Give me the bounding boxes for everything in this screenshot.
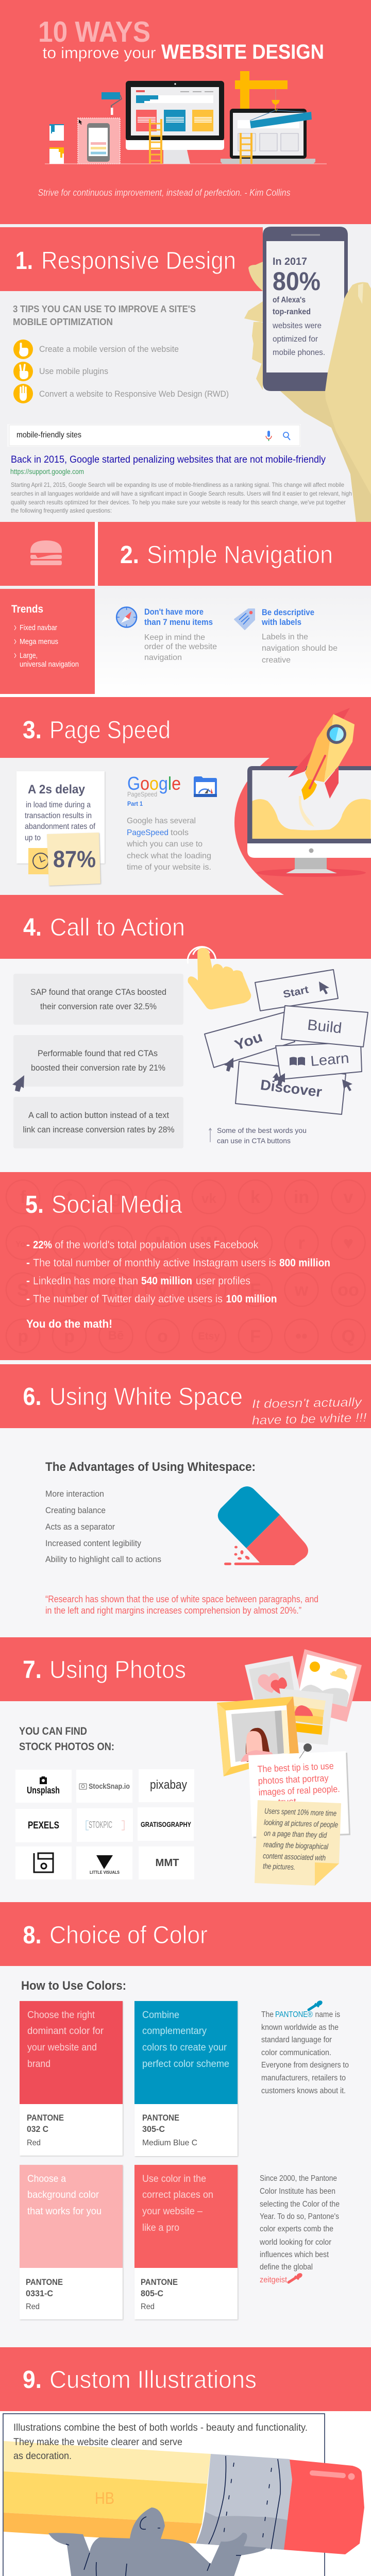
social icon pattern: o <box>64 1233 75 1253</box>
tip: labels: creative <box>262 656 291 665</box>
social icon pattern <box>6 1180 365 1353</box>
tip: menu items <box>144 607 217 662</box>
research quote <box>45 1594 318 1616</box>
heading: simple navigation: 2. <box>120 541 139 569</box>
text: pantone name: The <box>261 2010 274 2019</box>
logo: StockSnap <box>76 1770 132 1803</box>
heading: simple navigation: Simple Navigation <box>147 541 333 569</box>
color card: 305-C: colors to create your <box>142 2042 227 2053</box>
social icon pattern: p <box>18 1327 28 1346</box>
statistics list: LinkedIn has more than <box>33 1275 138 1287</box>
illustration: CTA word buttons: Discover <box>260 1077 323 1100</box>
sticky note: 87% <box>47 833 100 886</box>
text: color of the year: selecting the Color of the <box>260 2200 340 2209</box>
icon: burger menu panel <box>0 522 95 586</box>
color card: 805-C: correct places on <box>142 2190 213 2200</box>
logo: Little Visuals: LITTLE VISUALS <box>90 1870 120 1875</box>
text: pantone name: Everyone from designers to <box>261 2061 349 2070</box>
social icon pattern: m <box>108 1280 124 1300</box>
color card: 805-C <box>134 2165 238 2319</box>
phone with statistic: 80% <box>273 267 321 296</box>
note: best tip: The best tip is to use <box>257 1761 334 1774</box>
tip: menu items: than 7 menu items <box>144 618 213 627</box>
social icon pattern: vk <box>201 1191 216 1206</box>
text: color of the year: Color Institute has been <box>260 2187 335 2196</box>
color card: 032 C: PANTONE <box>27 2113 64 2123</box>
card: button vs link <box>13 1097 183 1148</box>
statistics list: 100 million <box>226 1293 277 1305</box>
social icon pattern: w <box>294 1280 309 1300</box>
logo: Gratisography <box>138 1807 194 1841</box>
panel: section 9 custom illustrations <box>0 2347 371 2576</box>
logo: Stokpic <box>77 1808 133 1842</box>
subheading: stock photos <box>19 1725 114 1753</box>
social icon pattern: •• <box>295 1327 308 1346</box>
tip: labels: with labels <box>261 618 301 627</box>
logo: Pexels: PEXELS <box>28 1820 59 1831</box>
panel: section 4 call to action <box>0 895 371 1172</box>
logo: Pexels <box>15 1809 72 1842</box>
color card: 305-C <box>134 2001 238 2156</box>
panel: trends: Mega menus <box>20 638 58 646</box>
card: SAP: SAP found that orange CTAs boosted <box>30 988 166 997</box>
panel: trends <box>0 589 95 694</box>
search result: the following frequently asked questions: <box>11 507 112 514</box>
heading: page speed: Page Speed <box>49 717 171 744</box>
tip 3 <box>13 384 229 403</box>
text: color of the year: world looking for color <box>259 2238 331 2247</box>
text: color of the year: influences which best <box>260 2250 329 2259</box>
statistics list: 540 million <box>141 1275 192 1287</box>
heading: page speed: 3. <box>23 717 42 744</box>
logo: MMT <box>139 1846 194 1879</box>
logo: pixabay <box>139 1769 194 1802</box>
tip: labels: navigation should be <box>262 644 338 653</box>
icon: red eyedropper <box>289 2272 303 2282</box>
subheading: stock photos: STOCK PHOTOS ON: <box>19 1741 114 1753</box>
advantages list <box>45 1489 161 1564</box>
research quote: in the left and right margins increases comprehension by almost 20%.” <box>45 1605 301 1616</box>
card: Performable <box>13 1035 183 1087</box>
note: yellow study fact <box>255 1800 341 1886</box>
text: pantone name: customers knows about it. <box>261 2087 346 2095</box>
social icon pattern: * <box>206 1280 213 1300</box>
panel: section 5 social media <box>0 1172 371 1360</box>
icon: cursor <box>12 1075 24 1092</box>
statistics list: You do the math! <box>26 1317 112 1330</box>
heading: using white space: 6. <box>23 1383 41 1411</box>
search result: Back in 2015, Google started penalizing websites that are not mobile-friendly <box>11 454 326 465</box>
google pagespeed logo <box>127 773 181 807</box>
social icon pattern: F <box>250 1327 261 1346</box>
text: pantone name: color communication. <box>261 2048 331 2057</box>
panel: section 8 choice of color <box>0 1902 371 2319</box>
text: pantone name: standard language for <box>261 2036 332 2044</box>
panel: section 1 responsive design <box>0 224 371 522</box>
social icon pattern: p <box>64 1327 75 1346</box>
social icon pattern: t <box>252 1233 258 1253</box>
tips heading: MOBILE OPTIMIZATION <box>13 316 113 327</box>
search box <box>7 424 301 447</box>
statistics list: of the world's total population uses Facebook <box>55 1239 259 1251</box>
illustration text: Illustrations combine the best of both worlds - beauty and functionality. <box>13 2422 308 2433</box>
color card: 032 C <box>20 2001 123 2156</box>
color card: 0331-C: that works for you <box>27 2206 102 2217</box>
logo: Unsplash: Unsplash <box>27 1785 60 1795</box>
social icon pattern: oo <box>338 1280 359 1300</box>
heading: call to action: Call to Action <box>50 914 185 941</box>
logo: Stokpic: STOKPIC <box>89 1820 112 1830</box>
logo: Gratisography: GRATISOGRAPHY <box>141 1820 192 1828</box>
color card: 805-C: PANTONE <box>141 2277 178 2287</box>
social icon pattern: Q <box>342 1327 355 1346</box>
heading: using photos: 7. <box>23 1656 42 1684</box>
logo: camera mark <box>15 1846 72 1879</box>
color card: 032 C: Red <box>27 2139 41 2147</box>
quote: Strive for continuous improvement, instead of perfection. - Kim Collins <box>38 188 291 198</box>
color card: 305-C: 305-C <box>142 2124 165 2134</box>
text: color of the year: Since 2000, the Pantone <box>260 2174 337 2183</box>
pagespeed text: check what the loading <box>127 852 211 860</box>
note: yellow study fact: looking at pictures of people <box>264 1818 338 1829</box>
heading: social media: 5. <box>25 1191 44 1218</box>
social icon pattern: r <box>298 1233 305 1253</box>
color card: 805-C: Red <box>141 2302 155 2311</box>
note: best tip: photos that portray <box>258 1773 329 1786</box>
google pagespeed logo: Part 1 <box>127 800 143 807</box>
social icon pattern: F <box>250 1280 261 1300</box>
statistics list: - <box>26 1239 30 1251</box>
handwritten note <box>251 1395 367 1428</box>
tip 2: Use mobile plugins <box>39 367 108 376</box>
note: yellow study fact: reading the biographical <box>263 1840 329 1851</box>
logo: MMT: MMT <box>156 1857 179 1869</box>
text: pantone name: PANTONE® <box>275 2010 313 2019</box>
tip 2 <box>13 362 108 381</box>
icon: eraser <box>218 1486 308 1565</box>
pagespeed text: tools <box>171 828 189 837</box>
note: best tip <box>248 1743 349 1837</box>
tip: labels: Labels in the <box>262 633 308 641</box>
tip: menu items: Don't have more <box>144 607 204 617</box>
note: best tip: trust <box>278 1796 296 1807</box>
illustration frame <box>3 2414 325 2576</box>
card: SAP: their conversion rate over 32.5% <box>40 1002 157 1011</box>
text: color of the year: Year. To do so, Pantone's <box>260 2212 339 2221</box>
illustration text <box>13 2422 308 2462</box>
illustration: pencil carried by a person <box>4 2441 364 2576</box>
social icon pattern: v <box>158 1280 167 1300</box>
advantages list: More interaction <box>45 1489 104 1499</box>
phone with statistic: optimized for <box>273 335 318 344</box>
tip 1 <box>13 340 179 359</box>
advantages list: Increased content legibility <box>45 1539 142 1548</box>
card: 2s delay statistic <box>16 771 105 886</box>
heading: responsive design: 1. <box>15 247 33 275</box>
logo: Unsplash <box>15 1770 72 1803</box>
subheading: how to use colors: How to Use Colors: <box>21 1979 126 1993</box>
color card: 305-C: perfect color scheme <box>142 2059 229 2070</box>
panel: trends: universal navigation <box>20 660 79 669</box>
social icon pattern: k <box>250 1188 260 1207</box>
text: color of the year: color experts comb the <box>260 2225 333 2233</box>
phone with statistic <box>263 227 348 391</box>
color card: 805-C: like a pro <box>142 2223 179 2233</box>
icon: hand fingers behind phone <box>244 262 263 390</box>
social icon pattern: f <box>20 1188 26 1207</box>
color card: 0331-C: 0331-C <box>26 2289 53 2298</box>
illustration: CTA word buttons: Learn <box>310 1050 350 1069</box>
social icon pattern: v <box>344 1188 353 1207</box>
panel: section 3 page speed <box>0 697 371 895</box>
card: Performable: boosted their conversion rate by 21% <box>31 1063 165 1073</box>
color card: 0331-C <box>20 2165 123 2319</box>
statistics list: user profiles <box>196 1275 250 1287</box>
heading: custom illustrations: 9. <box>23 2366 42 2394</box>
pagespeed text: which you can use to <box>126 840 203 849</box>
card: Performable: Performable found that red CTAs <box>38 1049 158 1058</box>
card: 2s delay statistic: transaction results in <box>25 811 92 820</box>
note: yellow study fact: the pictures. <box>263 1862 295 1872</box>
card: 2s delay statistic: up to <box>25 834 41 842</box>
caption with arrow: can use in CTA buttons <box>217 1137 291 1145</box>
hero illustration: building websites <box>45 71 327 164</box>
note: yellow study fact: on a page than they did <box>264 1829 327 1840</box>
statistics list: - <box>26 1257 30 1269</box>
text: pantone name: known worldwide as the <box>261 2023 339 2032</box>
color card: 032 C: your website and <box>27 2042 97 2053</box>
handwritten note: have to be white !!! <box>251 1411 367 1428</box>
social icon pattern: S <box>17 1280 29 1300</box>
advantages list: Creating balance <box>45 1506 106 1515</box>
heading: simple navigation <box>98 522 371 586</box>
tip: menu items: order of the website <box>144 642 217 651</box>
search result: https://support.google.com <box>10 468 84 476</box>
card: 2s delay statistic: abandonment rates of <box>25 822 96 831</box>
tip: menu items: navigation <box>144 653 182 662</box>
color card: 032 C: 032 C <box>27 2124 48 2134</box>
color card: 032 C: Choose the right <box>27 2010 95 2021</box>
statistics list: 800 million <box>279 1257 330 1269</box>
logo: Little Visuals <box>76 1846 132 1879</box>
social icon pattern: o <box>157 1327 168 1346</box>
tips heading <box>13 303 196 327</box>
illustration: pencil carried by a person: HB <box>95 2489 114 2507</box>
social icon pattern: t <box>66 1188 72 1207</box>
illustration: CTA word buttons <box>205 970 368 1114</box>
panel: trends: Trends <box>11 603 43 615</box>
color card: 032 C: brand <box>27 2059 50 2070</box>
statistics list: - <box>26 1293 30 1305</box>
heading: responsive design: Responsive Design <box>41 247 236 275</box>
note: yellow study fact: content associated with <box>263 1852 326 1862</box>
color card: 305-C: PANTONE <box>142 2113 179 2123</box>
color card: 805-C: 805-C <box>141 2289 163 2298</box>
title <box>38 15 324 63</box>
color card: 305-C: Combine <box>142 2010 179 2021</box>
pagespeed text: time of your website is. <box>127 863 211 872</box>
search result <box>10 454 352 514</box>
color card: 305-C: complementary <box>142 2026 207 2037</box>
color card: 0331-C: Choose a <box>27 2174 66 2184</box>
social icon pattern: g <box>111 1188 121 1207</box>
icon: tag <box>234 609 255 630</box>
icon: hand and arm holding phone <box>280 282 371 522</box>
social icon pattern: v <box>111 1233 121 1253</box>
color card: 305-C: Medium Blue C <box>142 2139 197 2147</box>
illustration: rocket launching from monitor <box>234 708 371 895</box>
text: color of the year: zeitgeist <box>260 2276 288 2284</box>
title: WEBSITE DESIGN <box>161 41 324 63</box>
hero panel <box>0 0 371 224</box>
heading: using photos: Using Photos <box>49 1656 186 1684</box>
tip 3: Convert a website to Responsive Web Design (RWD) <box>39 389 229 399</box>
illustration: CTA word buttons: Start <box>282 984 310 1001</box>
panel: trends: Large, <box>20 652 38 660</box>
text: pantone name <box>261 2010 349 2095</box>
logo: StockSnap: StockSnap.io <box>89 1782 130 1791</box>
pagespeed text: PageSpeed <box>127 828 168 837</box>
heading: custom illustrations: Custom Illustrations <box>49 2366 257 2394</box>
card: button vs link: A call to action button instead of a text <box>28 1111 169 1120</box>
heading: call to action: 4. <box>23 914 42 941</box>
pagespeed text: Google has several <box>127 817 196 825</box>
card: 2s delay statistic: A 2s delay <box>28 783 86 796</box>
title: 10 WAYS <box>38 15 150 48</box>
social icon pattern: M <box>155 1233 170 1253</box>
panel: trends: Fixed navbar <box>20 624 57 632</box>
tip: labels <box>261 608 338 665</box>
social icon pattern: Bē <box>108 1329 124 1343</box>
color card: 0331-C: background color <box>27 2190 99 2200</box>
caption with arrow <box>209 1126 307 1145</box>
illustration text: as decoration. <box>13 2451 72 2462</box>
statistics list: 22% <box>33 1239 52 1251</box>
illustration: photos collage <box>217 1649 362 1776</box>
text: pantone name: name is <box>315 2010 340 2019</box>
title: to improve your <box>42 44 156 62</box>
subheading: advantages: The Advantages of Using Whitespace: <box>45 1460 256 1474</box>
icon: pagespeed gauge <box>194 776 217 797</box>
text: color of the year <box>259 2174 340 2284</box>
statistics list: - <box>26 1275 30 1287</box>
phone with statistic: websites were <box>272 321 322 330</box>
phone with statistic: mobile phones. <box>273 348 325 357</box>
heading: social media: Social Media <box>52 1191 182 1218</box>
illustration text: They make the website clearer and serve <box>13 2437 182 2448</box>
card: 2s delay statistic: in load time during a <box>26 801 91 809</box>
research quote: “Research has shown that the use of white space between paragraphs, and <box>45 1594 318 1604</box>
search box: mobile-friendly sites <box>16 431 81 439</box>
color card: 0331-C: Red <box>26 2302 40 2311</box>
color card: 805-C: Use color in the <box>142 2174 206 2184</box>
heading: using white space: Using White Space <box>49 1383 243 1411</box>
google pagespeed logo: PageSpeed <box>127 790 157 798</box>
tip: menu items: Keep in mind the <box>144 633 205 642</box>
icon: blue eyedropper <box>309 1999 323 2010</box>
card: SAP <box>13 974 183 1025</box>
phone with statistic: In 2017 <box>273 256 307 267</box>
statistics list <box>26 1239 330 1330</box>
statistics list: The number of Twitter daily active users is <box>33 1293 223 1305</box>
tips heading: 3 TIPS YOU CAN USE TO IMPROVE A SITE'S <box>13 303 196 314</box>
phone with statistic: of Alexa's <box>273 296 306 304</box>
social icon pattern: in <box>294 1188 309 1207</box>
tip 1: Create a mobile version of the website <box>39 345 179 354</box>
panel: section 2 simple navigation <box>0 522 371 697</box>
card: button vs link: link can increase conversion rates by 28% <box>23 1125 175 1134</box>
phone with statistic: top-ranked <box>273 308 311 316</box>
sticky note: 87%: 87% <box>53 846 96 872</box>
advantages list: Acts as a separator <box>45 1522 115 1532</box>
panel: section 6 white space <box>0 1364 371 1616</box>
social icon pattern: c <box>64 1280 74 1300</box>
color card: 0331-C: PANTONE <box>26 2277 63 2287</box>
social icon pattern: o <box>157 1188 168 1207</box>
color card: 805-C: your website – <box>142 2206 203 2217</box>
color card: 032 C: dominant color for <box>27 2026 104 2037</box>
pagespeed text <box>126 817 211 872</box>
text: pantone name: manufacturers, retailers to <box>261 2074 346 2082</box>
heading: choice of color: 8. <box>23 1922 41 1949</box>
icon: compass <box>116 607 137 628</box>
social icon pattern: W <box>200 1233 217 1253</box>
handwritten note: It doesn't actually <box>252 1395 363 1411</box>
note: best tip: images of real people. <box>258 1784 340 1798</box>
advantages list: Ability to highlight call to actions <box>45 1555 161 1564</box>
subheading: stock photos: YOU CAN FIND <box>19 1725 87 1737</box>
icon: pointing hand <box>188 947 251 1009</box>
icon: clock sticky note <box>28 848 49 874</box>
social icon pattern: You <box>15 1240 30 1249</box>
logo: pixabay: pixabay <box>150 1778 187 1792</box>
google pagespeed logo: Google <box>127 773 181 794</box>
note: yellow study fact: Users spent 10% more time <box>264 1807 336 1818</box>
social icon pattern: Etsy <box>198 1331 220 1342</box>
illustration: CTA word buttons: You <box>232 1028 264 1053</box>
caption with arrow: Some of the best words you <box>217 1126 307 1134</box>
panel: section 7 using photos <box>0 1637 371 1886</box>
text: color of the year: define the global <box>260 2263 313 2272</box>
tip: labels: Be descriptive <box>262 608 314 617</box>
icon: pin <box>299 1743 312 1758</box>
social icon pattern: ♥ <box>343 1233 353 1253</box>
illustration: CTA word buttons: Build <box>307 1017 343 1037</box>
statistics list: The total number of monthly active Instagram users is <box>33 1257 276 1269</box>
heading: choice of color: Choice of Color <box>49 1922 208 1949</box>
